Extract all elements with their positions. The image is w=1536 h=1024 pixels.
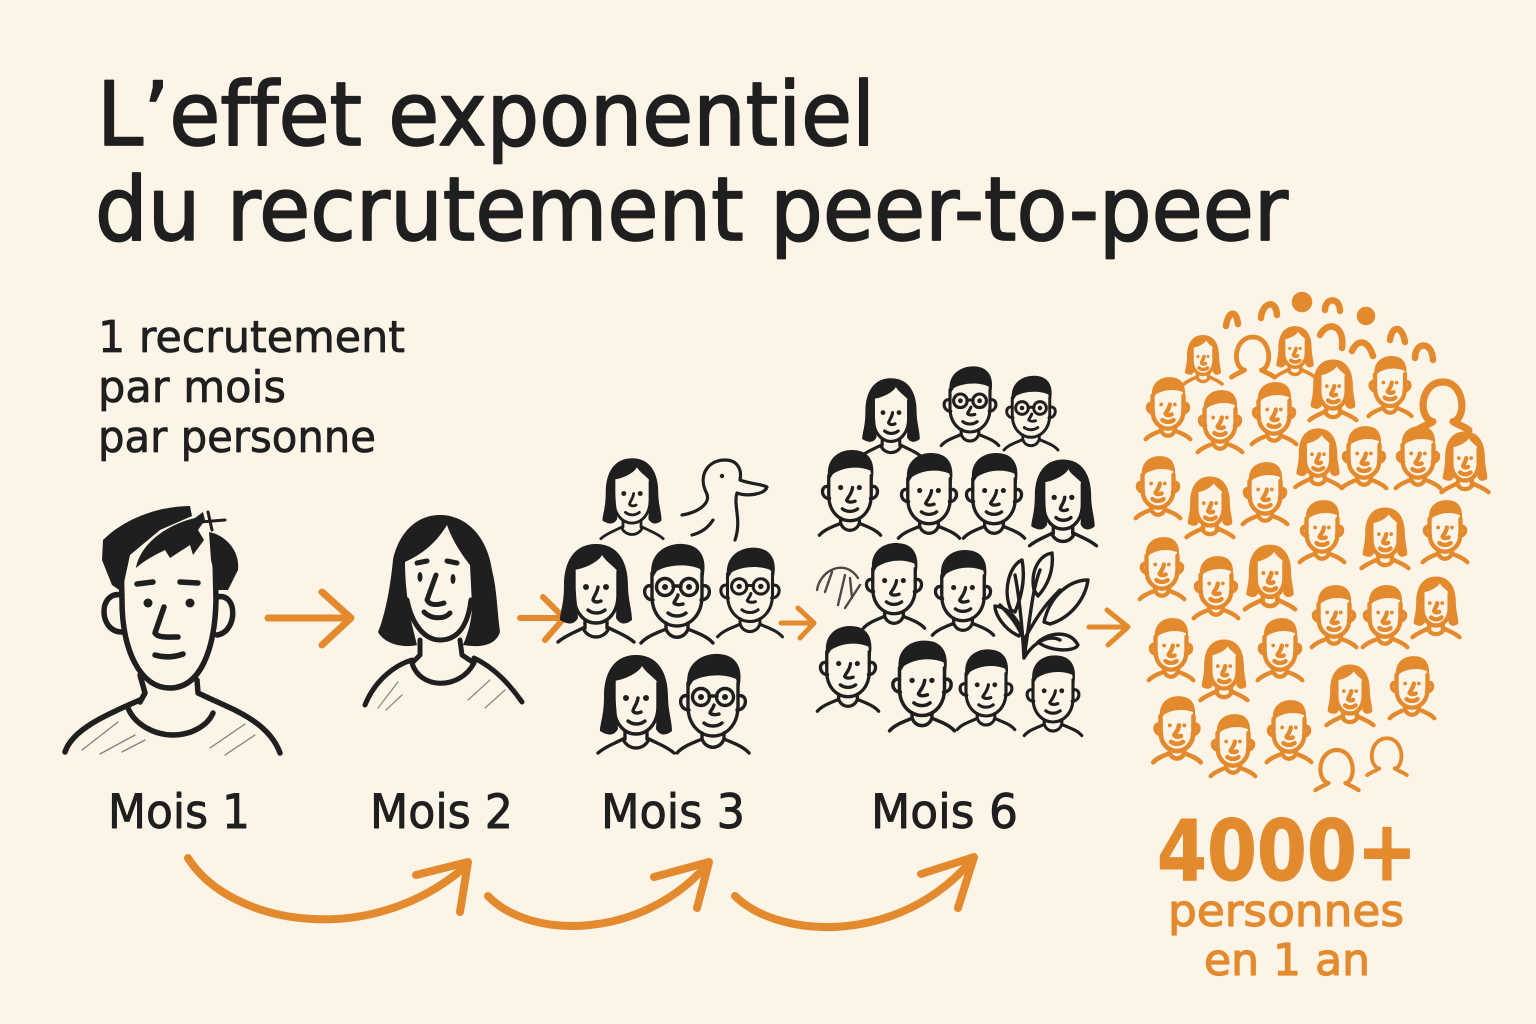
people group: month 6 — [817, 366, 1096, 736]
month labels: Mois 1 — [108, 785, 250, 840]
icon: unfinished hair sketch — [817, 568, 860, 608]
result: 4000+ people in a year: 4000+ — [1157, 802, 1417, 900]
month labels: Mois 2 — [370, 785, 513, 840]
person: month 2 woman — [365, 515, 522, 710]
title: du recrutement peer-to-peer — [95, 158, 1289, 261]
icon: duck — [682, 460, 767, 540]
month labels: Mois 3 — [601, 785, 745, 840]
sketched tops of heads — [1226, 295, 1433, 360]
text block: recruitment rate: 1 recrutement — [98, 312, 405, 363]
curved arrows — [188, 857, 974, 927]
icon: plant — [995, 553, 1088, 658]
people cloud: 4000+ — [1136, 295, 1489, 790]
month labels — [108, 785, 1018, 840]
month labels: Mois 6 — [871, 785, 1018, 840]
text block: recruitment rate — [98, 312, 405, 463]
text block: recruitment rate: par personne — [98, 412, 376, 463]
result: 4000+ people in a year: personnes — [1168, 886, 1404, 937]
arrow: month 1 to 2 — [268, 592, 351, 645]
text block: recruitment rate: par mois — [98, 362, 286, 413]
arrow: month 6 to year — [1089, 610, 1128, 645]
arrow: month 2 to 3 — [520, 597, 564, 640]
people group: month 3 — [558, 458, 782, 753]
result: 4000+ people in a year: en 1 an — [1204, 935, 1370, 986]
title: L’effet exponentiel — [97, 63, 875, 166]
result: 4000+ people in a year — [1157, 802, 1417, 986]
title — [95, 63, 1289, 261]
arrow: month 3 to 6 — [781, 608, 814, 638]
person: month 1 man — [65, 506, 280, 755]
